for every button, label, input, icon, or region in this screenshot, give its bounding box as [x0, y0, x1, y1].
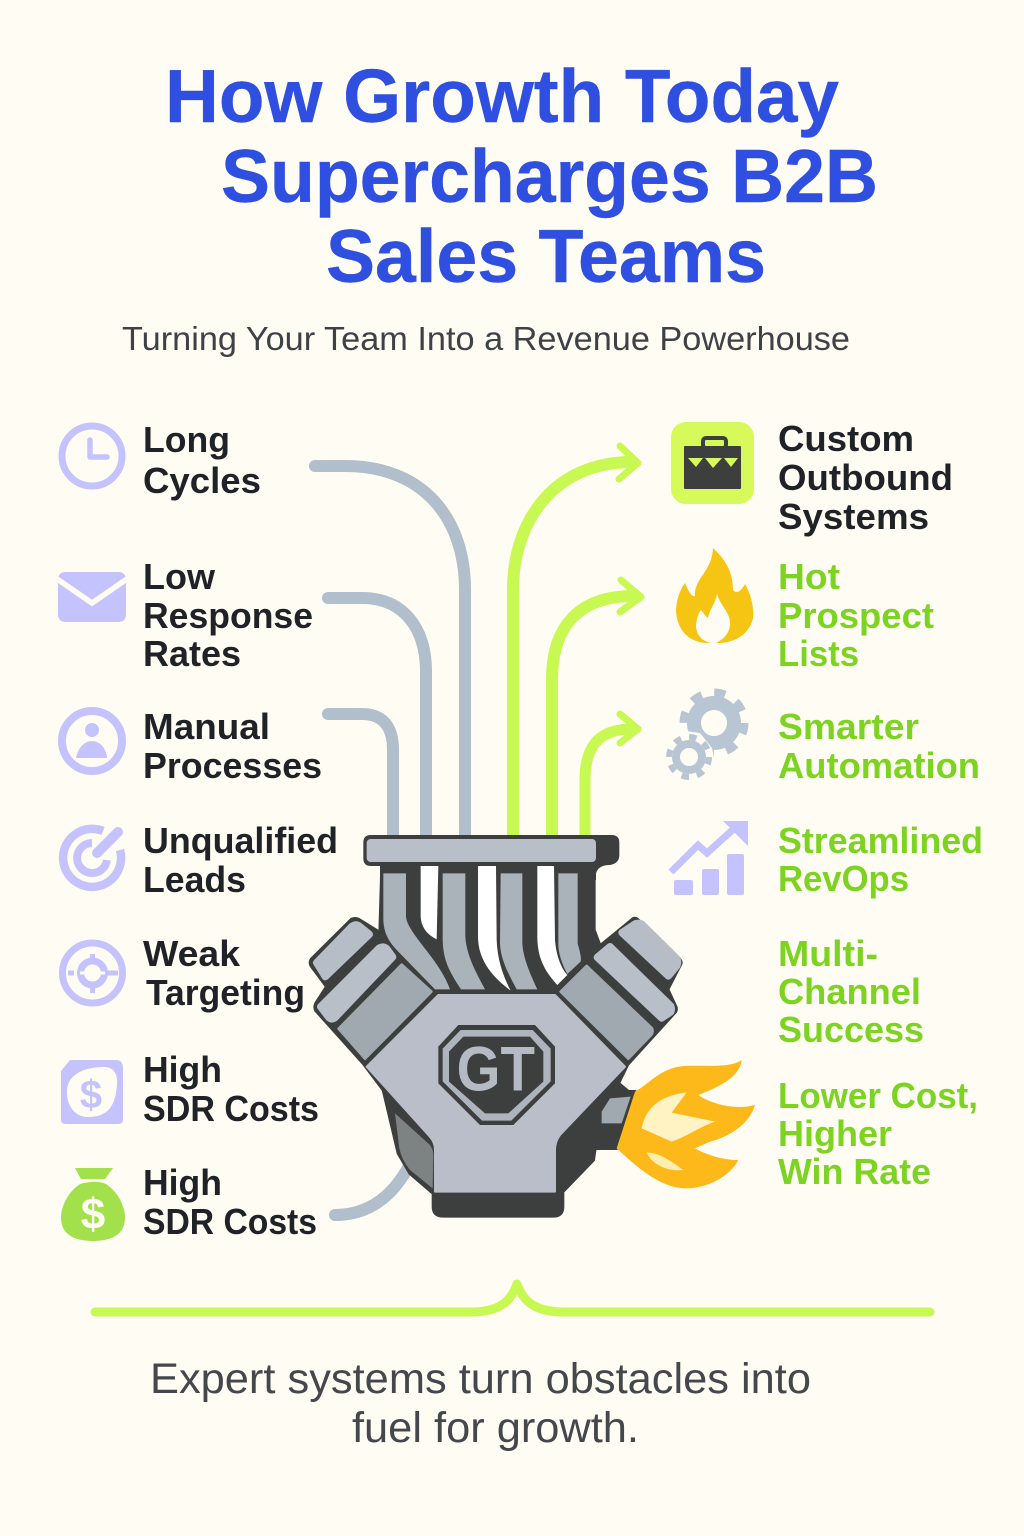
- label: manual processes: Processes: [143, 745, 322, 786]
- green output arrows: [513, 446, 641, 840]
- intake runners: [383, 873, 581, 989]
- icon: crosshair: [62, 943, 122, 1003]
- icon: briefcase: [671, 422, 754, 504]
- label: hot prospect lists: Prospect: [778, 595, 934, 636]
- label: unqualified leads: Leads: [143, 859, 246, 900]
- label: manual processes: Manual: [143, 706, 270, 747]
- label: custom outbound systems: Custom: [778, 418, 914, 459]
- right lower patch: [602, 1097, 631, 1123]
- title: [165, 54, 878, 298]
- label: custom outbound systems: Systems: [778, 496, 929, 537]
- label: weak targeting: Targeting: [146, 972, 305, 1013]
- left lower patch: [395, 1113, 433, 1188]
- right labels: [778, 418, 983, 1192]
- label: weak targeting: Weak: [143, 933, 241, 974]
- icon: flame: [676, 548, 753, 643]
- label: hot prospect lists: [778, 556, 934, 674]
- label: multi-channel success: [778, 933, 924, 1050]
- label: smarter automation: Automation: [778, 745, 980, 786]
- label: hot prospect lists: Hot: [778, 556, 840, 597]
- label: low response rates: [143, 556, 313, 674]
- GT badge: [438, 1025, 555, 1125]
- label: multi-channel success: Channel: [778, 971, 921, 1012]
- label: long cycles: Long: [143, 419, 230, 460]
- icon: clock: [62, 426, 122, 486]
- right cylinder bank: [561, 923, 678, 1059]
- label: manual processes: [143, 706, 322, 786]
- GT badge: GT: [457, 1035, 535, 1105]
- label: high sdr costs second: SDR Costs: [143, 1201, 317, 1242]
- label: unqualified leads: Unqualified: [143, 820, 338, 861]
- caption: fuel for growth.: [352, 1404, 639, 1452]
- icon: dollar tag: [61, 1060, 123, 1124]
- label: multi-channel success: Success: [778, 1009, 924, 1050]
- label: low response rates: Low: [143, 556, 216, 597]
- label: high sdr costs: [143, 1049, 319, 1129]
- icon: money bag: $: [81, 1190, 105, 1239]
- exhaust flame: [617, 1060, 755, 1188]
- label: custom outbound systems: [778, 418, 953, 537]
- label: high sdr costs: SDR Costs: [143, 1088, 319, 1129]
- label: long cycles: [143, 419, 261, 501]
- subtitle: Turning Your Team Into a Revenue Powerhouse: [122, 320, 850, 357]
- bracket: [95, 1284, 930, 1312]
- label: lower cost higher win rate: Higher: [778, 1113, 892, 1154]
- label: weak targeting: [143, 933, 305, 1013]
- caption: [150, 1355, 811, 1452]
- label: smarter automation: [778, 706, 980, 786]
- icon: dollar tag: $: [80, 1073, 102, 1117]
- icon: growth chart: [671, 821, 748, 895]
- title: Supercharges B2B: [221, 134, 878, 218]
- icon: target with dart: [63, 829, 121, 887]
- grey input pipes: [315, 466, 465, 1215]
- label: lower cost higher win rate: Lower Cost,: [778, 1075, 978, 1116]
- label: lower cost higher win rate: [778, 1075, 978, 1192]
- label: long cycles: Cycles: [143, 460, 261, 501]
- caption: Expert systems turn obstacles into: [150, 1355, 811, 1403]
- label: hot prospect lists: Lists: [778, 633, 859, 674]
- label: low response rates: Response: [143, 595, 313, 636]
- engine dark frame: [310, 865, 681, 1216]
- label: smarter automation: Smarter: [778, 706, 919, 747]
- label: unqualified leads: [143, 820, 338, 900]
- left labels: [143, 419, 338, 1242]
- label: streamlined revops: Streamlined: [778, 820, 983, 861]
- label: multi-channel success: Multi-: [778, 933, 878, 974]
- left cylinder bank: [317, 925, 431, 1059]
- label: high sdr costs second: High: [143, 1162, 222, 1203]
- icon: envelope: [57, 572, 127, 622]
- label: high sdr costs second: [143, 1162, 317, 1242]
- engine: [310, 835, 755, 1216]
- manifold top bar: [363, 835, 619, 880]
- label: streamlined revops: RevOps: [778, 858, 909, 899]
- manifold gaps: [421, 866, 567, 991]
- engine body plate: [367, 995, 625, 1192]
- title: Sales Teams: [326, 214, 766, 298]
- icon: money bag: [61, 1168, 125, 1241]
- label: lower cost higher win rate: Win Rate: [778, 1151, 931, 1192]
- label: low response rates: Rates: [143, 633, 241, 674]
- label: high sdr costs: High: [143, 1049, 222, 1090]
- icon: gears: [669, 693, 744, 777]
- label: custom outbound systems: Outbound: [778, 457, 953, 498]
- icon: person: [62, 711, 122, 771]
- title: How Growth Today: [165, 54, 839, 138]
- label: streamlined revops: [778, 820, 983, 899]
